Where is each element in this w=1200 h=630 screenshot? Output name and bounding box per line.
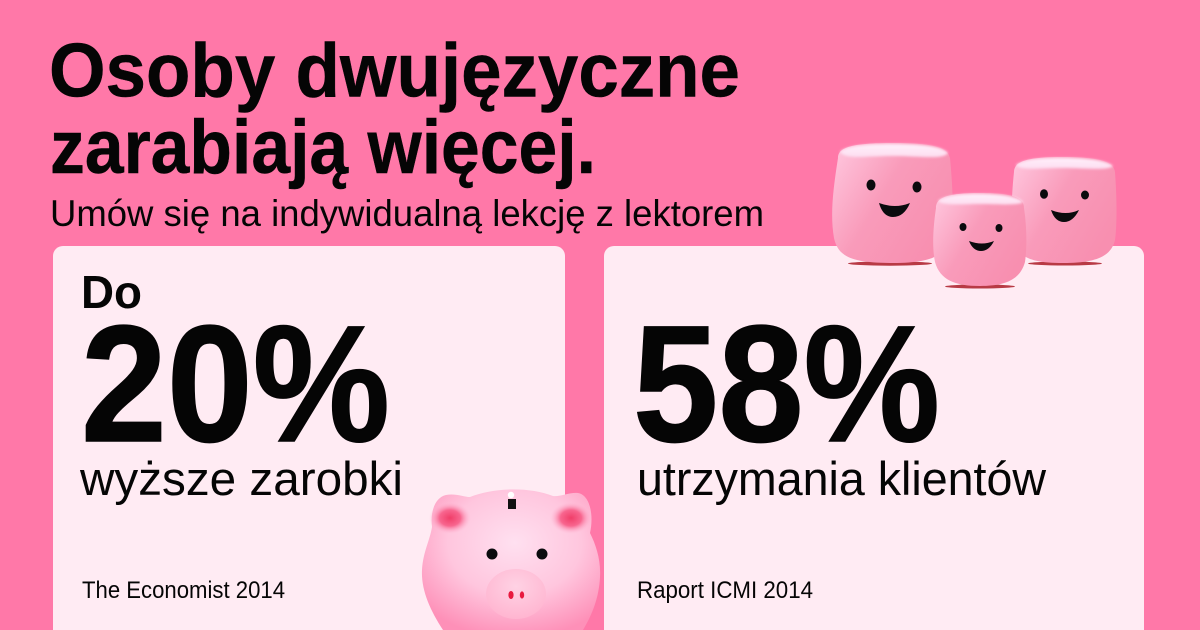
statistic: 20%: 20% (81, 292, 390, 477)
icon: smiling marshmallow, small (933, 193, 1026, 288)
title: Osoby dwujęzyczne (49, 28, 740, 114)
icon: smiling marshmallow, right (1012, 157, 1116, 266)
source: Raport ICMI 2014 (637, 577, 813, 604)
title (49, 28, 740, 190)
source: The Economist 2014 (82, 577, 285, 604)
icon: piggy bank (422, 489, 600, 630)
panel: earnings (53, 246, 565, 630)
statistic caption: utrzymania klientów (637, 452, 1047, 505)
statistic: 58%: 58% (633, 292, 940, 477)
title: zarabiają więcej. (50, 105, 596, 190)
subtitle: Umów się na indywidualną lekcję z lektorem (50, 193, 764, 234)
panel: retention (604, 246, 1144, 630)
label: Do: Do (81, 266, 142, 318)
icon: smiling marshmallow, large (832, 143, 953, 266)
statistic caption: wyższe zarobki (79, 452, 403, 505)
